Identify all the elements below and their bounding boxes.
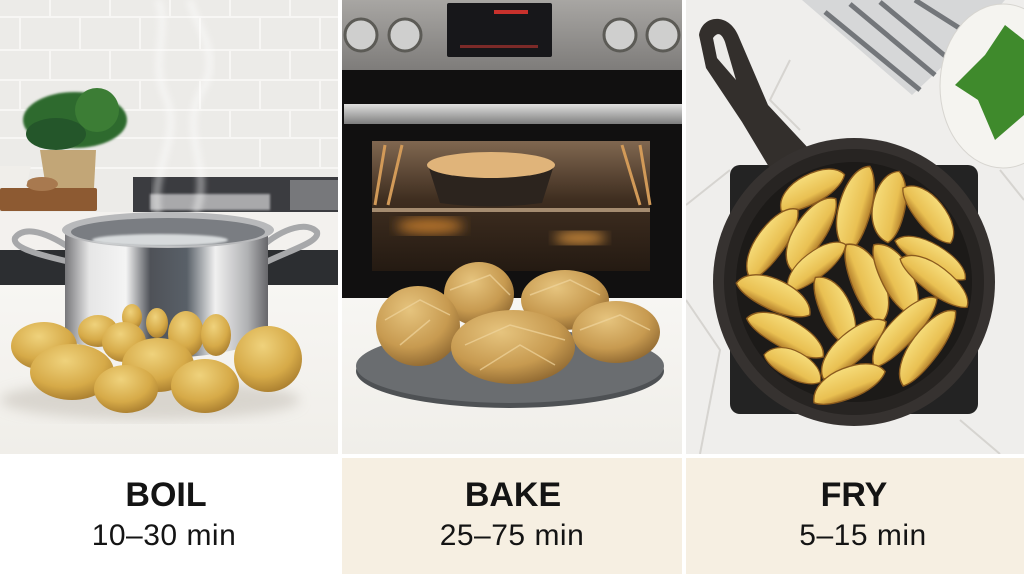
caption: fry [686, 458, 1024, 574]
oven display [447, 3, 552, 57]
caption: boil [0, 458, 340, 574]
white counter [342, 298, 682, 454]
oven handle [344, 104, 682, 124]
stove in the background [133, 177, 338, 213]
caption: boil: 10–30 min [92, 519, 236, 552]
potted plant [23, 88, 127, 188]
caption: boil: BOIL [125, 476, 207, 514]
slate plate [356, 329, 664, 408]
marble veins [686, 60, 1024, 454]
boil potatoes [11, 304, 302, 413]
striped towel [802, 0, 1005, 95]
caption: fry: 5–15 min [799, 519, 927, 552]
caption: bake: 25–75 min [440, 519, 584, 552]
wooden board and bowl [0, 166, 97, 211]
herb plate [940, 4, 1024, 168]
oven window [372, 141, 650, 271]
black burner [730, 165, 978, 414]
baked potatoes [376, 262, 660, 384]
potato wedges [732, 160, 977, 411]
steel pot [15, 212, 317, 358]
steam [151, 177, 208, 212]
oven knobs [345, 19, 679, 51]
caption: bake [342, 458, 682, 574]
oven door [342, 70, 682, 298]
caption: fry: FRY [821, 476, 888, 514]
panel: fry photo [686, 0, 1024, 454]
panel: boil photo [0, 0, 338, 454]
white counter [0, 285, 338, 356]
panel: bake photo [342, 0, 682, 454]
caption: bake: BAKE [465, 476, 561, 514]
skillet [699, 19, 995, 426]
counter shadow [0, 380, 300, 420]
